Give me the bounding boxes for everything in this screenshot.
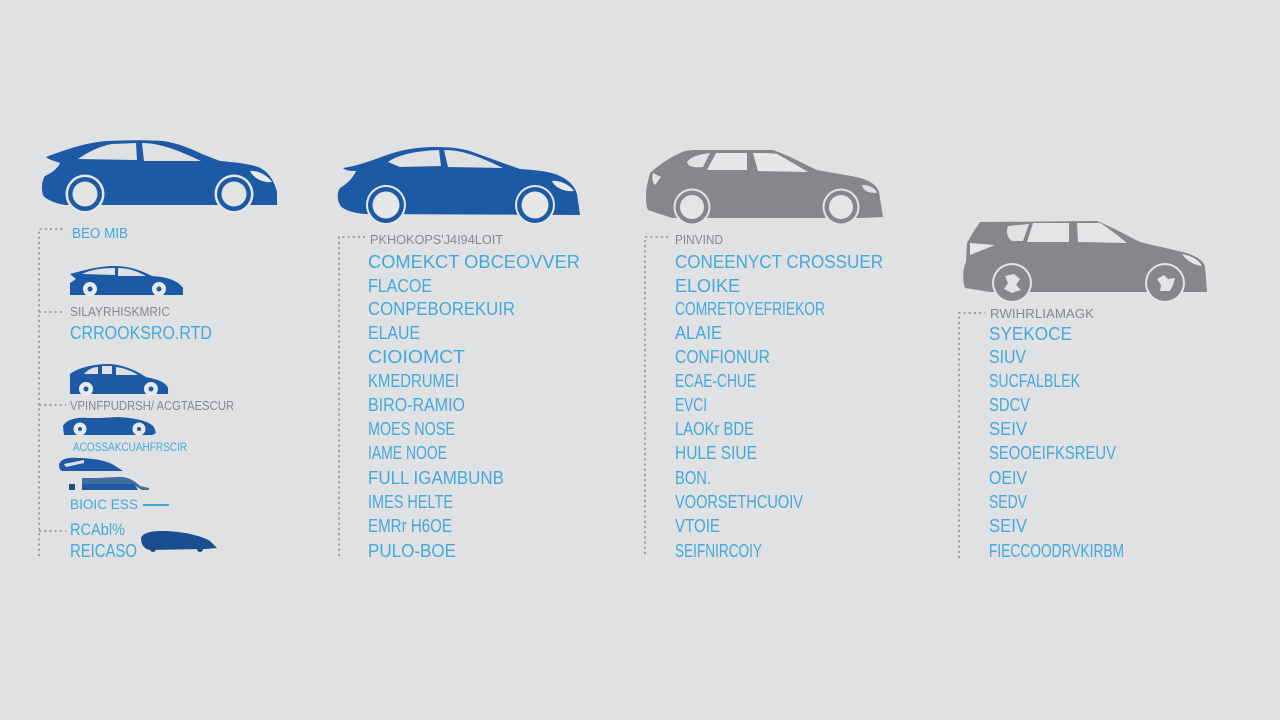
list: trim entries: MOES NOSE [368, 419, 455, 439]
list: trim entries: PULO-BOE [368, 541, 456, 561]
list: trim entries: SEDV [989, 492, 1027, 512]
label: gray heading: PKHOKOPS'J4I94LOIT [370, 233, 503, 247]
list: trim entries: VTOIE [675, 516, 720, 536]
list: trim entries: CONEENYCT CROSSUER [675, 252, 883, 272]
list: trim entries: HULE SIUE [675, 443, 757, 463]
icon: small coupe C [63, 417, 156, 436]
list: trim entries: SEIV [989, 516, 1027, 536]
label: gray heading 1: SILAYRHISKMRIC [70, 305, 170, 319]
list: trim entries: BIRO-RAMIO [368, 395, 465, 415]
list: trim entries: FULL IGAMBUNB [368, 468, 504, 488]
label: gray heading: PINVIND [675, 233, 723, 247]
icon: small car fragment E [69, 477, 149, 490]
list: trim entries: ALAIE [675, 323, 722, 343]
list: trim entries: SUCFALBLEK [989, 371, 1080, 391]
list: trim entries: EVCI [675, 395, 707, 415]
panel: column 3 [645, 150, 883, 561]
list: trim entries: ELAUE [368, 323, 420, 343]
list: trim entries: FLACOE [368, 276, 432, 296]
icon: large blue sedan [42, 140, 277, 214]
list: trim entries: SEIV [989, 419, 1027, 439]
list: trim entries: SDCV [989, 395, 1030, 415]
list: trim entries: KMEDRUMEI [368, 371, 459, 391]
list: trim entries: COMRETOYEFRIEKOR [675, 299, 825, 319]
icon: large gray crossover [646, 150, 883, 226]
list: trim entries: OEIV [989, 468, 1027, 488]
icon: large blue sedan 2 [338, 147, 580, 225]
label: top entry: BEO MIB [72, 225, 128, 242]
panel: column 2 [338, 147, 580, 561]
list: trim entries: CIOIOMCT [368, 347, 465, 367]
label: gray heading: RWIHRLIAMAGK [990, 307, 1095, 321]
list: trim entries: ECAE-CHUE [675, 371, 756, 391]
icon: small sedan A [70, 266, 183, 296]
list: trim entries: CONPEBOREKUIR [368, 299, 515, 319]
connector line [339, 237, 365, 556]
list: trim entries [989, 324, 1124, 561]
list: trim entries: FIECCOODRVKIRBM [989, 541, 1124, 561]
icon: small sedan B [70, 364, 168, 396]
label: gray heading 2: VPINFPUDRSH/ ACGTAESCUR [70, 399, 234, 413]
list: trim entries: LAOKr BDE [675, 419, 754, 439]
icon: small car fragment D [59, 458, 123, 471]
icon: large gray SUV [963, 221, 1207, 303]
list: trim entries: BON. [675, 468, 711, 488]
label: blue entry: CRROOKSRO.RTD [70, 323, 212, 343]
list: trim entries: SEOOEIFKSREUV [989, 443, 1116, 463]
connector line [645, 237, 670, 554]
icon: small dark car F [141, 531, 217, 552]
list: trim entries: ELOIKE [675, 276, 740, 296]
label: blue entry bottom: REICASO [70, 541, 137, 561]
list: trim entries: IAME NOOE [368, 443, 447, 463]
list: trim entries: COMEKCT OBCEOVVER [368, 252, 580, 272]
list: trim entries: CONFIONUR [675, 347, 770, 367]
connector line [959, 313, 985, 558]
list: trim entries: IMES HELTE [368, 492, 453, 512]
panel: column 1 [39, 140, 277, 561]
list: trim entries: EMRr H6OE [368, 516, 452, 536]
connector lines [39, 229, 66, 556]
list: trim entries: SYEKOCE [989, 324, 1072, 344]
list: trim entries: SEIFNIRCOIY [675, 541, 762, 561]
panel: column 4 [959, 221, 1207, 561]
label: small blue entry: ACOSSAKCUAHFRSCIR [73, 440, 187, 454]
list: trim entries: SIUV [989, 347, 1026, 367]
list: trim entries [368, 252, 580, 561]
label: blue entry with rule: BIOIC ESS [70, 496, 138, 512]
label: blue entry lower: RCAbl% [70, 520, 125, 539]
list: trim entries: VOORSETHCUOIV [675, 492, 803, 512]
list: trim entries [675, 252, 883, 561]
